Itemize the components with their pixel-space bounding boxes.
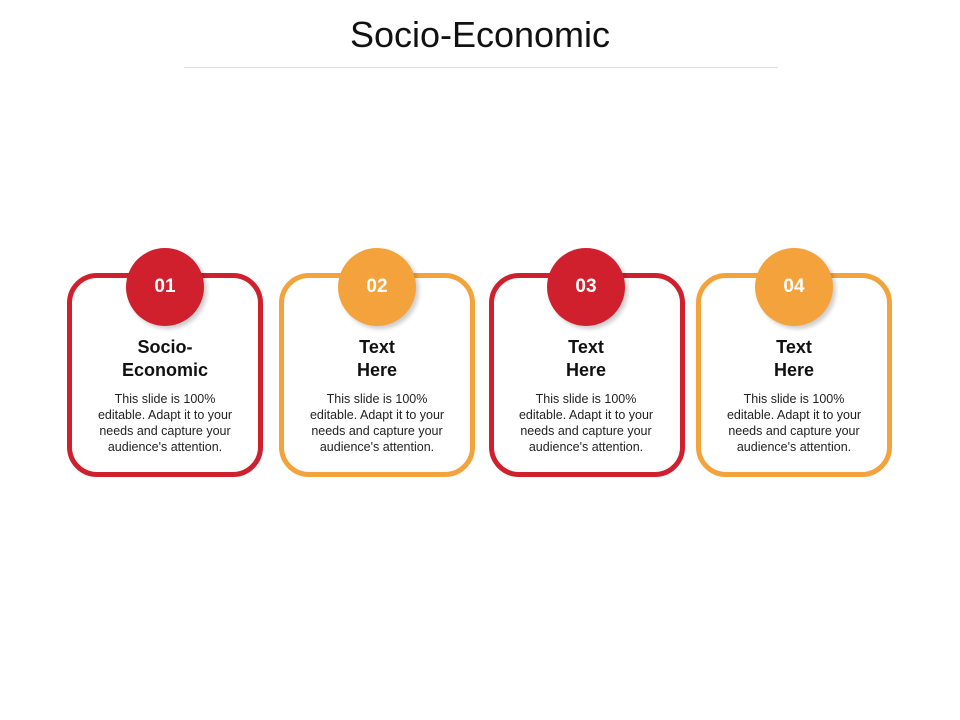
text 4: This slide is 100% xyxy=(744,392,844,406)
badge 03: 03 xyxy=(575,276,597,297)
heading 2: Text xyxy=(359,337,395,357)
badge 04 xyxy=(755,248,833,326)
badge 04: 04 xyxy=(783,276,805,297)
text 2: needs and capture your xyxy=(311,424,443,438)
text 3 xyxy=(519,392,653,454)
text 2: audience's attention. xyxy=(320,440,434,454)
text 2: editable. Adapt it to your xyxy=(310,408,444,422)
panel: card 3 xyxy=(489,273,685,477)
text 3: editable. Adapt it to your xyxy=(519,408,653,422)
text 2 xyxy=(310,392,444,454)
panel: card 4 xyxy=(696,273,892,477)
heading 4: Here xyxy=(774,360,814,380)
text 1: This slide is 100% xyxy=(115,392,215,406)
heading 1: Economic xyxy=(122,360,208,380)
heading 1: Socio- xyxy=(137,337,192,357)
heading 3: Here xyxy=(566,360,606,380)
heading 4 xyxy=(774,337,814,380)
heading 1 xyxy=(122,337,208,380)
text 3: audience's attention. xyxy=(529,440,643,454)
heading 2: Here xyxy=(357,360,397,380)
heading 4: Text xyxy=(776,337,812,357)
text 1: audience's attention. xyxy=(108,440,222,454)
text 4: audience's attention. xyxy=(737,440,851,454)
text 1: editable. Adapt it to your xyxy=(98,408,232,422)
title: Socio-Economic xyxy=(350,14,610,55)
heading 3: Text xyxy=(568,337,604,357)
badge 02 xyxy=(338,248,416,326)
text 3: needs and capture your xyxy=(520,424,652,438)
badge 02: 02 xyxy=(366,276,388,297)
badge 01 xyxy=(126,248,204,326)
heading 2 xyxy=(357,337,397,380)
badge 01: 01 xyxy=(154,276,176,297)
text 4 xyxy=(727,392,861,454)
panel: card 1 xyxy=(67,273,263,477)
text 2: This slide is 100% xyxy=(327,392,427,406)
text 1 xyxy=(98,392,232,454)
text 1: needs and capture your xyxy=(99,424,231,438)
text 3: This slide is 100% xyxy=(536,392,636,406)
badge 03 xyxy=(547,248,625,326)
text 4: editable. Adapt it to your xyxy=(727,408,861,422)
text 4: needs and capture your xyxy=(728,424,860,438)
panel: card 2 xyxy=(279,273,475,477)
heading 3 xyxy=(566,337,606,380)
